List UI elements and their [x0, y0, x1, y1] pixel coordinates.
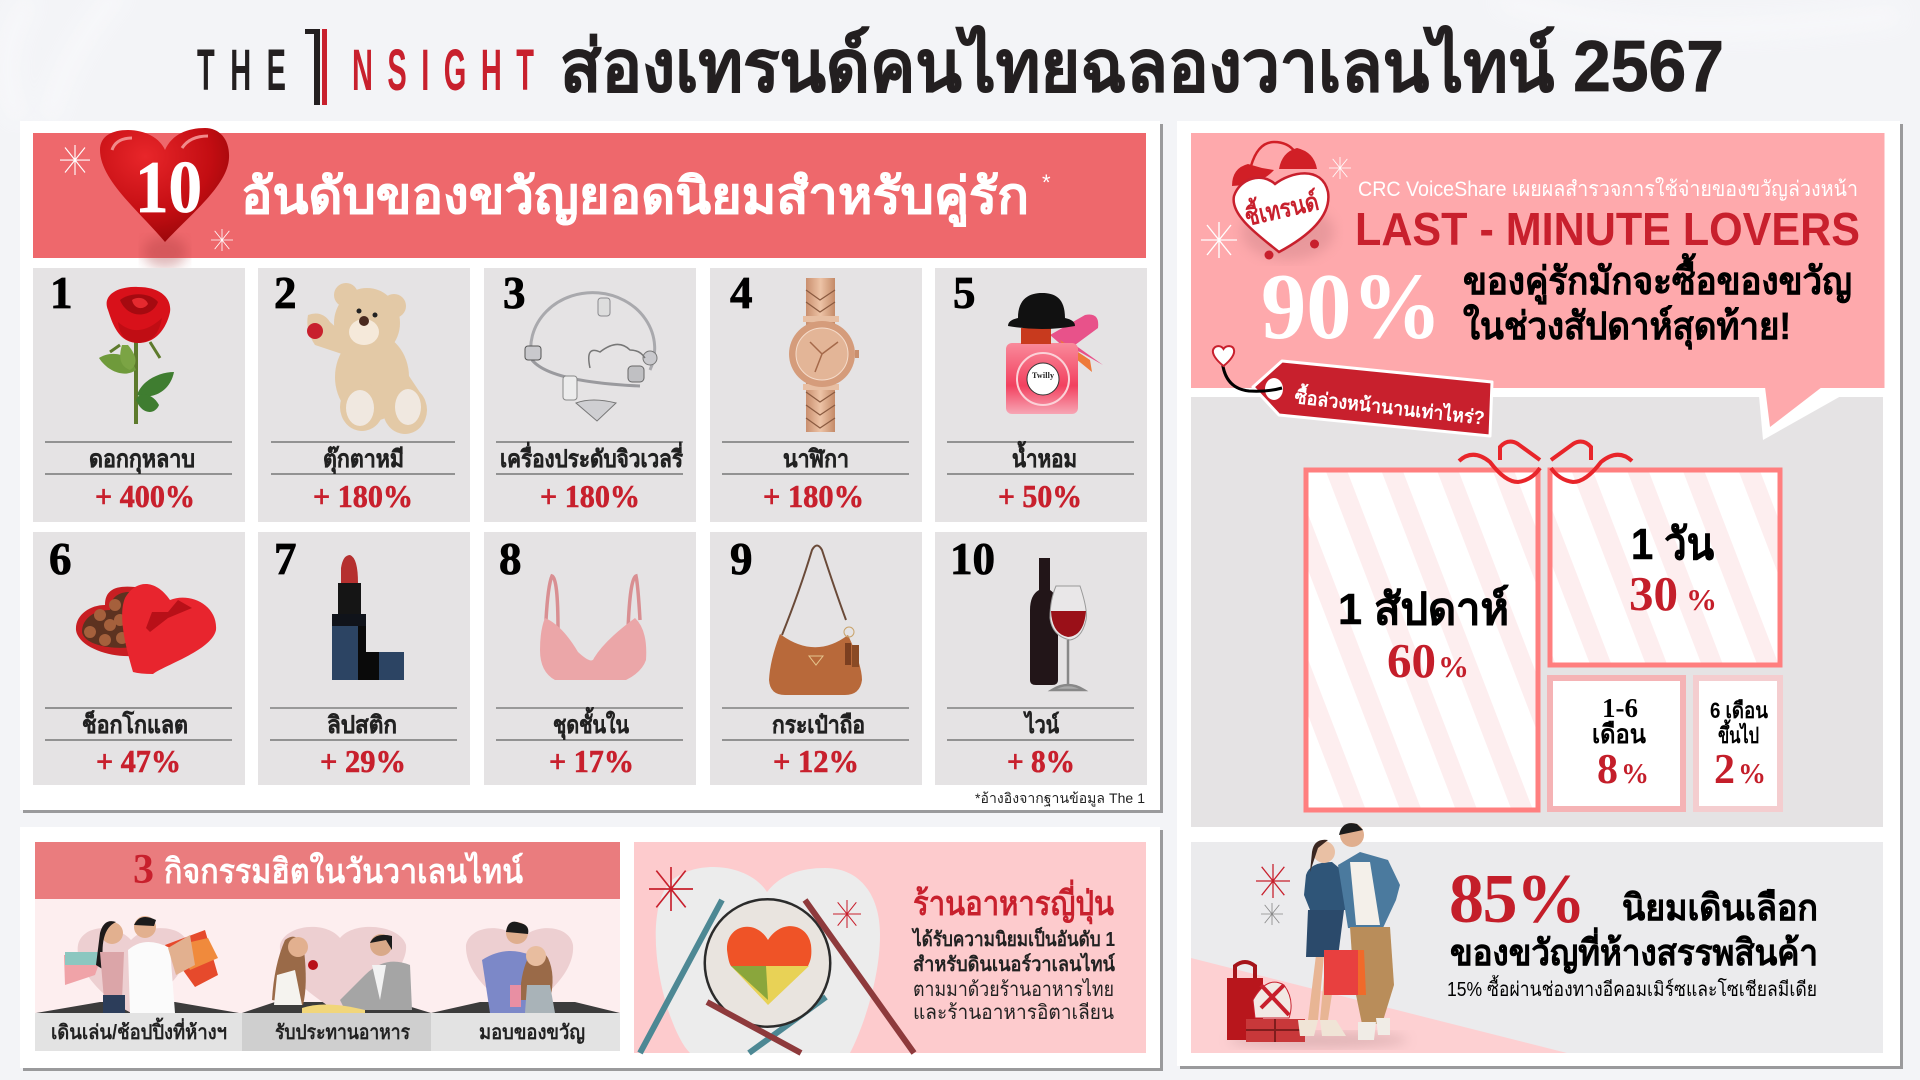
icon: sushi and chopsticks — [640, 898, 914, 1053]
activity 1: shopping — [36, 916, 239, 1013]
card 2: teddy bear — [258, 268, 470, 522]
card 7: lipstick: 7 — [274, 534, 296, 584]
card 9: handbag: + 12% — [773, 743, 859, 779]
gift box: 6 months up: 6 เดือน — [1710, 698, 1768, 723]
panel: right — [1177, 121, 1903, 1069]
icon: ribbon — [1459, 442, 1632, 482]
gift box: 1 day — [1550, 470, 1780, 665]
gift box: 1 week: 60 — [1387, 633, 1436, 688]
gift box: 6 months up: 2 — [1714, 747, 1735, 793]
card 10: wine: 10 — [950, 534, 995, 584]
gift box: 1 day: 30 — [1629, 566, 1678, 621]
card 2: teddy bear: + 180% — [313, 478, 413, 514]
section heading: กิจกรรมฮิตในวันวาเลนไทน์ — [164, 851, 523, 891]
section: 3 activities — [35, 842, 620, 1051]
card 2: teddy bear: ตุ๊กตาหมี — [323, 446, 404, 475]
activity labels — [35, 1013, 620, 1051]
card 8: lingerie: + 17% — [549, 743, 634, 779]
panel: bottom left — [20, 827, 1163, 1071]
logo: The 1 Insight — [197, 29, 534, 105]
store text: ของขวัญที่ห้างสรรพสินค้า — [1450, 927, 1818, 974]
card 6: chocolate: + 47% — [96, 743, 181, 779]
card 4: watch: นาฬิกา — [783, 446, 849, 473]
card 1: rose: + 400% — [95, 478, 195, 514]
card 5: perfume: + 50% — [998, 478, 1082, 514]
icon: bra — [540, 576, 646, 680]
statement: ในช่วงสัปดาห์สุดท้าย! — [1463, 304, 1791, 350]
section heading: 3 — [133, 847, 154, 893]
icon: alarm clock heart — [1232, 142, 1334, 260]
activity labels: มอบของขวัญ — [479, 1022, 585, 1044]
gift box: 1-6 months: 1-6 — [1602, 693, 1638, 723]
card 5: perfume: 5 — [953, 268, 976, 318]
card 6: chocolate — [33, 532, 245, 785]
icon: perfume — [1006, 293, 1103, 414]
icon: perfume: Twilly — [1032, 371, 1054, 380]
stat: 90%: 90% — [1261, 255, 1442, 359]
icon: lipstick — [332, 555, 404, 680]
gift box: 6 months up: % — [1738, 759, 1766, 790]
activity 3: gift giving — [431, 922, 620, 1013]
gift box: 1 day: % — [1686, 582, 1717, 617]
icon: bracelet — [525, 293, 657, 421]
gift box: 1-6 months — [1550, 678, 1683, 809]
header banner: * — [1042, 170, 1051, 195]
icon: heart background — [656, 867, 880, 1053]
restaurant text: สำหรับดินเนอร์วาเลนไทน์ — [913, 952, 1115, 976]
card 9: handbag — [710, 532, 922, 785]
card 10: wine — [935, 532, 1147, 785]
icon: alarm clock heart: ชี้เทรนด์ — [1241, 182, 1321, 232]
section: Japanese restaurant — [634, 842, 1146, 1053]
card 5: perfume: น้ำหอม — [1012, 440, 1077, 473]
icon: teddy bear — [307, 283, 427, 434]
gift box: 1-6 months: % — [1621, 759, 1649, 790]
card 9: handbag: 9 — [730, 534, 752, 584]
activity labels: เดินเล่น/ช้อปปิ้งที่ห้างฯ — [51, 1017, 227, 1044]
icon: watch — [789, 278, 859, 432]
card 10: wine: ไวน์ — [1023, 710, 1059, 739]
heading text: ส่องเทรนด์คนไทยฉลองวาเลนไทน์ 2567 — [560, 24, 1724, 107]
gift box: 6 months up: ขึ้นไป — [1718, 719, 1759, 748]
tag: how far in advance: ซื้อล่วงหน้านานเท่าไหร่? — [1293, 382, 1486, 430]
icon: handbag — [769, 546, 862, 695]
card 1: rose: 1 — [50, 268, 72, 318]
icon: chocolate box — [76, 584, 216, 674]
footnote: *อ้างอิงจากฐานข้อมูล The 1 — [975, 790, 1145, 807]
banner heading: อันดับของขวัญยอดนิยมสำหรับคู่รัก — [241, 168, 1029, 227]
panel: top 10 gifts — [20, 121, 1163, 813]
card 3: jewellery — [484, 268, 696, 522]
card 1: rose — [33, 268, 245, 522]
card 4: watch — [710, 268, 922, 522]
restaurant text — [911, 879, 1115, 1024]
section: department store — [1191, 823, 1883, 1053]
card 3: jewellery: + 180% — [540, 478, 640, 514]
card 5: perfume — [935, 268, 1147, 522]
statement: ของคู่รักมักจะซื้อของขวัญ — [1463, 253, 1852, 305]
survey text: CRC VoiceShare เผยผลสำรวจการใช้จ่ายของขวัญล่วงหน้า — [1358, 177, 1858, 201]
restaurant text: ได้รับความนิยมเป็นอันดับ 1 — [911, 926, 1115, 951]
section heading — [133, 847, 523, 893]
card 7: lipstick: + 29% — [320, 743, 406, 779]
gift box: 1 week: 1 สัปดาห์ — [1338, 584, 1509, 634]
stat: 85%: 85% — [1449, 861, 1586, 938]
icon: shopping couple and gifts — [1227, 823, 1408, 1048]
card 3: jewellery: 3 — [503, 268, 526, 318]
gift box: 1-6 months: 8 — [1597, 747, 1618, 793]
card 4: watch: 4 — [730, 268, 752, 318]
header banner — [33, 128, 1146, 268]
restaurant text: ร้านอาหารญี่ปุ่น — [913, 879, 1114, 925]
icon: red heart with 10 — [100, 128, 229, 268]
activity 2: dining — [242, 927, 431, 1013]
card 8: lingerie: 8 — [499, 534, 522, 584]
card 2: teddy bear: 2 — [274, 268, 296, 318]
activity labels: รับประทานอาหาร — [275, 1022, 410, 1044]
icon: wine bottle and glass — [1030, 558, 1086, 690]
store text — [1447, 887, 1818, 1001]
logo: The 1 Insight: THE — [197, 37, 286, 103]
tag: how far in advance — [1213, 346, 1492, 436]
card 8: lingerie: ชุดชั้นใน — [553, 706, 629, 741]
store text: นิยมเดินเลือก — [1622, 887, 1818, 928]
icon: red heart with 10: 10 — [135, 147, 202, 229]
gift box: 1-6 months: เดือน — [1592, 719, 1646, 749]
store text: 15% ซื้อผ่านช่องทางอีคอมเมิร์ซและโซเชียลมีเดีย — [1447, 975, 1817, 1001]
card 6: chocolate: 6 — [49, 534, 72, 584]
icon: rose — [99, 287, 174, 424]
gift box: 1 week — [1306, 470, 1538, 810]
gift box: 6 months up — [1696, 678, 1780, 809]
card 10: wine: + 8% — [1007, 743, 1075, 779]
title — [197, 24, 1724, 107]
card 7: lipstick — [258, 532, 470, 785]
logo: The 1 Insight: NSIGHT — [352, 37, 534, 103]
card 3: jewellery: เครื่องประดับจิวเวลรี่ — [500, 441, 683, 473]
gift box: 1 week: % — [1438, 649, 1469, 684]
restaurant text: และร้านอาหารอิตาเลียน — [913, 1002, 1114, 1024]
heading: LAST - MINUTE LOVERS — [1355, 203, 1860, 255]
gift box: 1 day: 1 วัน — [1631, 520, 1714, 569]
statement — [1463, 253, 1852, 350]
card 8: lingerie — [484, 532, 696, 785]
card 6: chocolate: ช็อกโกแลต — [82, 710, 188, 739]
section: gift survey — [1191, 133, 1884, 827]
card 4: watch: + 180% — [763, 478, 864, 514]
card 9: handbag: กระเป๋าถือ — [772, 712, 865, 739]
restaurant text: ตามมาด้วยร้านอาหารไทย — [913, 978, 1114, 1001]
card 1: rose: ดอกกุหลาบ — [89, 446, 195, 475]
card 7: lipstick: ลิปสติก — [327, 712, 397, 739]
